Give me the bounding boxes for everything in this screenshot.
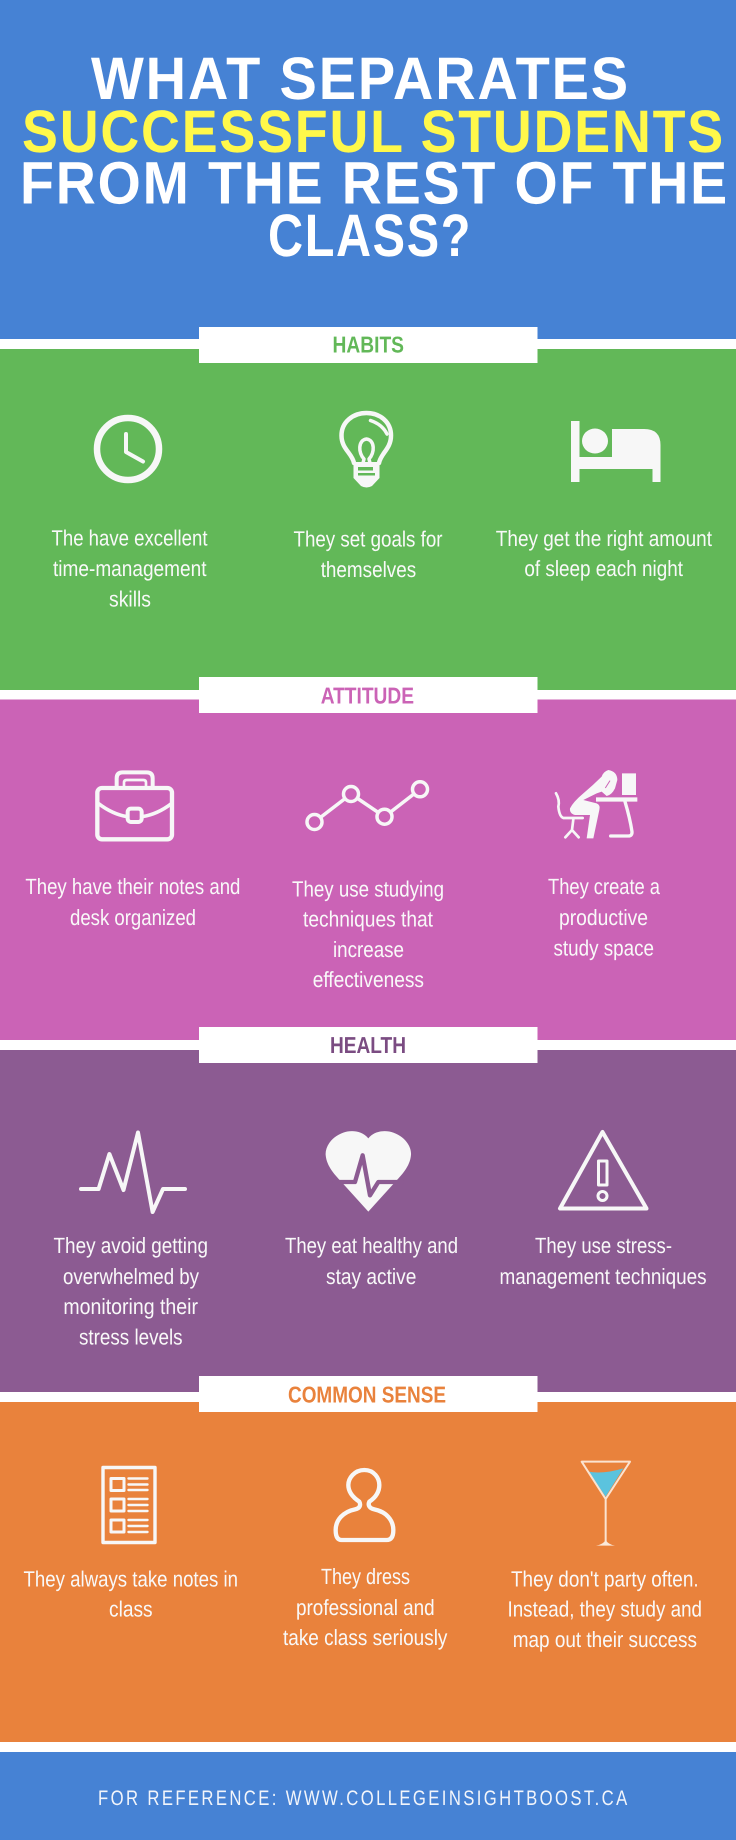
text: stress management: management techniques: [500, 1264, 707, 1289]
text: stress management: [500, 1233, 707, 1289]
panel: habits: [0, 327, 736, 690]
text: dress professional: They dress: [321, 1564, 410, 1589]
title: WHAT SEPARATES: [91, 45, 630, 112]
icon: person outline: [336, 1470, 393, 1540]
text: time management: The have excellent: [52, 526, 208, 551]
text: study techniques: techniques that: [303, 907, 433, 932]
icon: warning triangle: [560, 1132, 646, 1208]
panel: common sense: [0, 1376, 736, 1742]
text: stress monitoring: monitoring their: [63, 1294, 198, 1319]
text: party less: Instead, they study and: [508, 1597, 702, 1622]
text: party less: They don't party often.: [511, 1567, 699, 1592]
text: sleep: [496, 526, 712, 581]
text: eat healthy: They eat healthy and: [285, 1233, 458, 1258]
text: goals: They set goals for: [294, 527, 442, 552]
text: stress monitoring: stress levels: [79, 1325, 183, 1350]
icon: tired student at desk: [556, 770, 637, 838]
text: goals: [294, 527, 442, 582]
title: [20, 45, 729, 269]
text: dress professional: professional and: [296, 1595, 435, 1620]
text: notes organized: [25, 874, 240, 930]
text: dress professional: take class seriously: [283, 1625, 447, 1650]
text: notes organized: They have their notes and: [25, 874, 240, 899]
icon: heart with pulse: [326, 1131, 411, 1212]
icon: pulse line: [81, 1132, 185, 1212]
text: party less: map out their success: [513, 1627, 697, 1652]
text: stress monitoring: overwhelmed by: [63, 1264, 199, 1289]
text: study techniques: effectiveness: [313, 967, 424, 992]
text: study techniques: They use studying: [292, 877, 444, 902]
text: eat healthy: stay active: [326, 1264, 416, 1289]
text: goals: themselves: [321, 557, 416, 582]
panel: title header: [0, 0, 736, 339]
icon: briefcase: [97, 772, 172, 839]
text: dress professional: [283, 1564, 447, 1650]
text: stress monitoring: [54, 1233, 208, 1350]
heading: health: HEALTH: [330, 1032, 406, 1058]
text: study space: productive: [559, 905, 648, 930]
text: stress monitoring: They avoid getting: [54, 1233, 208, 1258]
text: study techniques: increase: [333, 937, 404, 962]
text: time management: [52, 526, 208, 612]
text: notes organized: desk organized: [70, 905, 196, 930]
text: study techniques: [292, 877, 444, 992]
heading: common sense: COMMON SENSE: [288, 1382, 446, 1408]
text: take notes: They always take notes in: [24, 1567, 238, 1592]
text: take notes: class: [109, 1597, 153, 1622]
icon: bed: [571, 421, 660, 482]
text: eat healthy: [285, 1233, 458, 1289]
title: CLASS?: [268, 202, 472, 269]
text: take notes: [24, 1567, 238, 1622]
text: study space: [548, 874, 661, 961]
icon: martini glass: [582, 1462, 630, 1546]
panel: health: [0, 1027, 736, 1392]
text: time management: skills: [109, 587, 151, 612]
heading: habits: HABITS: [332, 332, 404, 358]
text: sleep: of sleep each night: [524, 556, 683, 581]
text: study space: They create a: [548, 874, 661, 899]
text: time management: time-management: [53, 556, 206, 581]
text: stress management: They use stress-: [535, 1233, 672, 1258]
heading: attitude: ATTITUDE: [321, 682, 414, 708]
icon: light bulb: [342, 413, 391, 488]
icon: line chart: [307, 782, 428, 830]
text: party less: [508, 1567, 702, 1652]
icon: notes checklist: [103, 1468, 155, 1542]
panel: footer: [0, 1742, 736, 1840]
panel: attitude: [0, 677, 736, 1040]
text: study space: study space: [554, 936, 654, 961]
icon: clock: [97, 418, 159, 480]
